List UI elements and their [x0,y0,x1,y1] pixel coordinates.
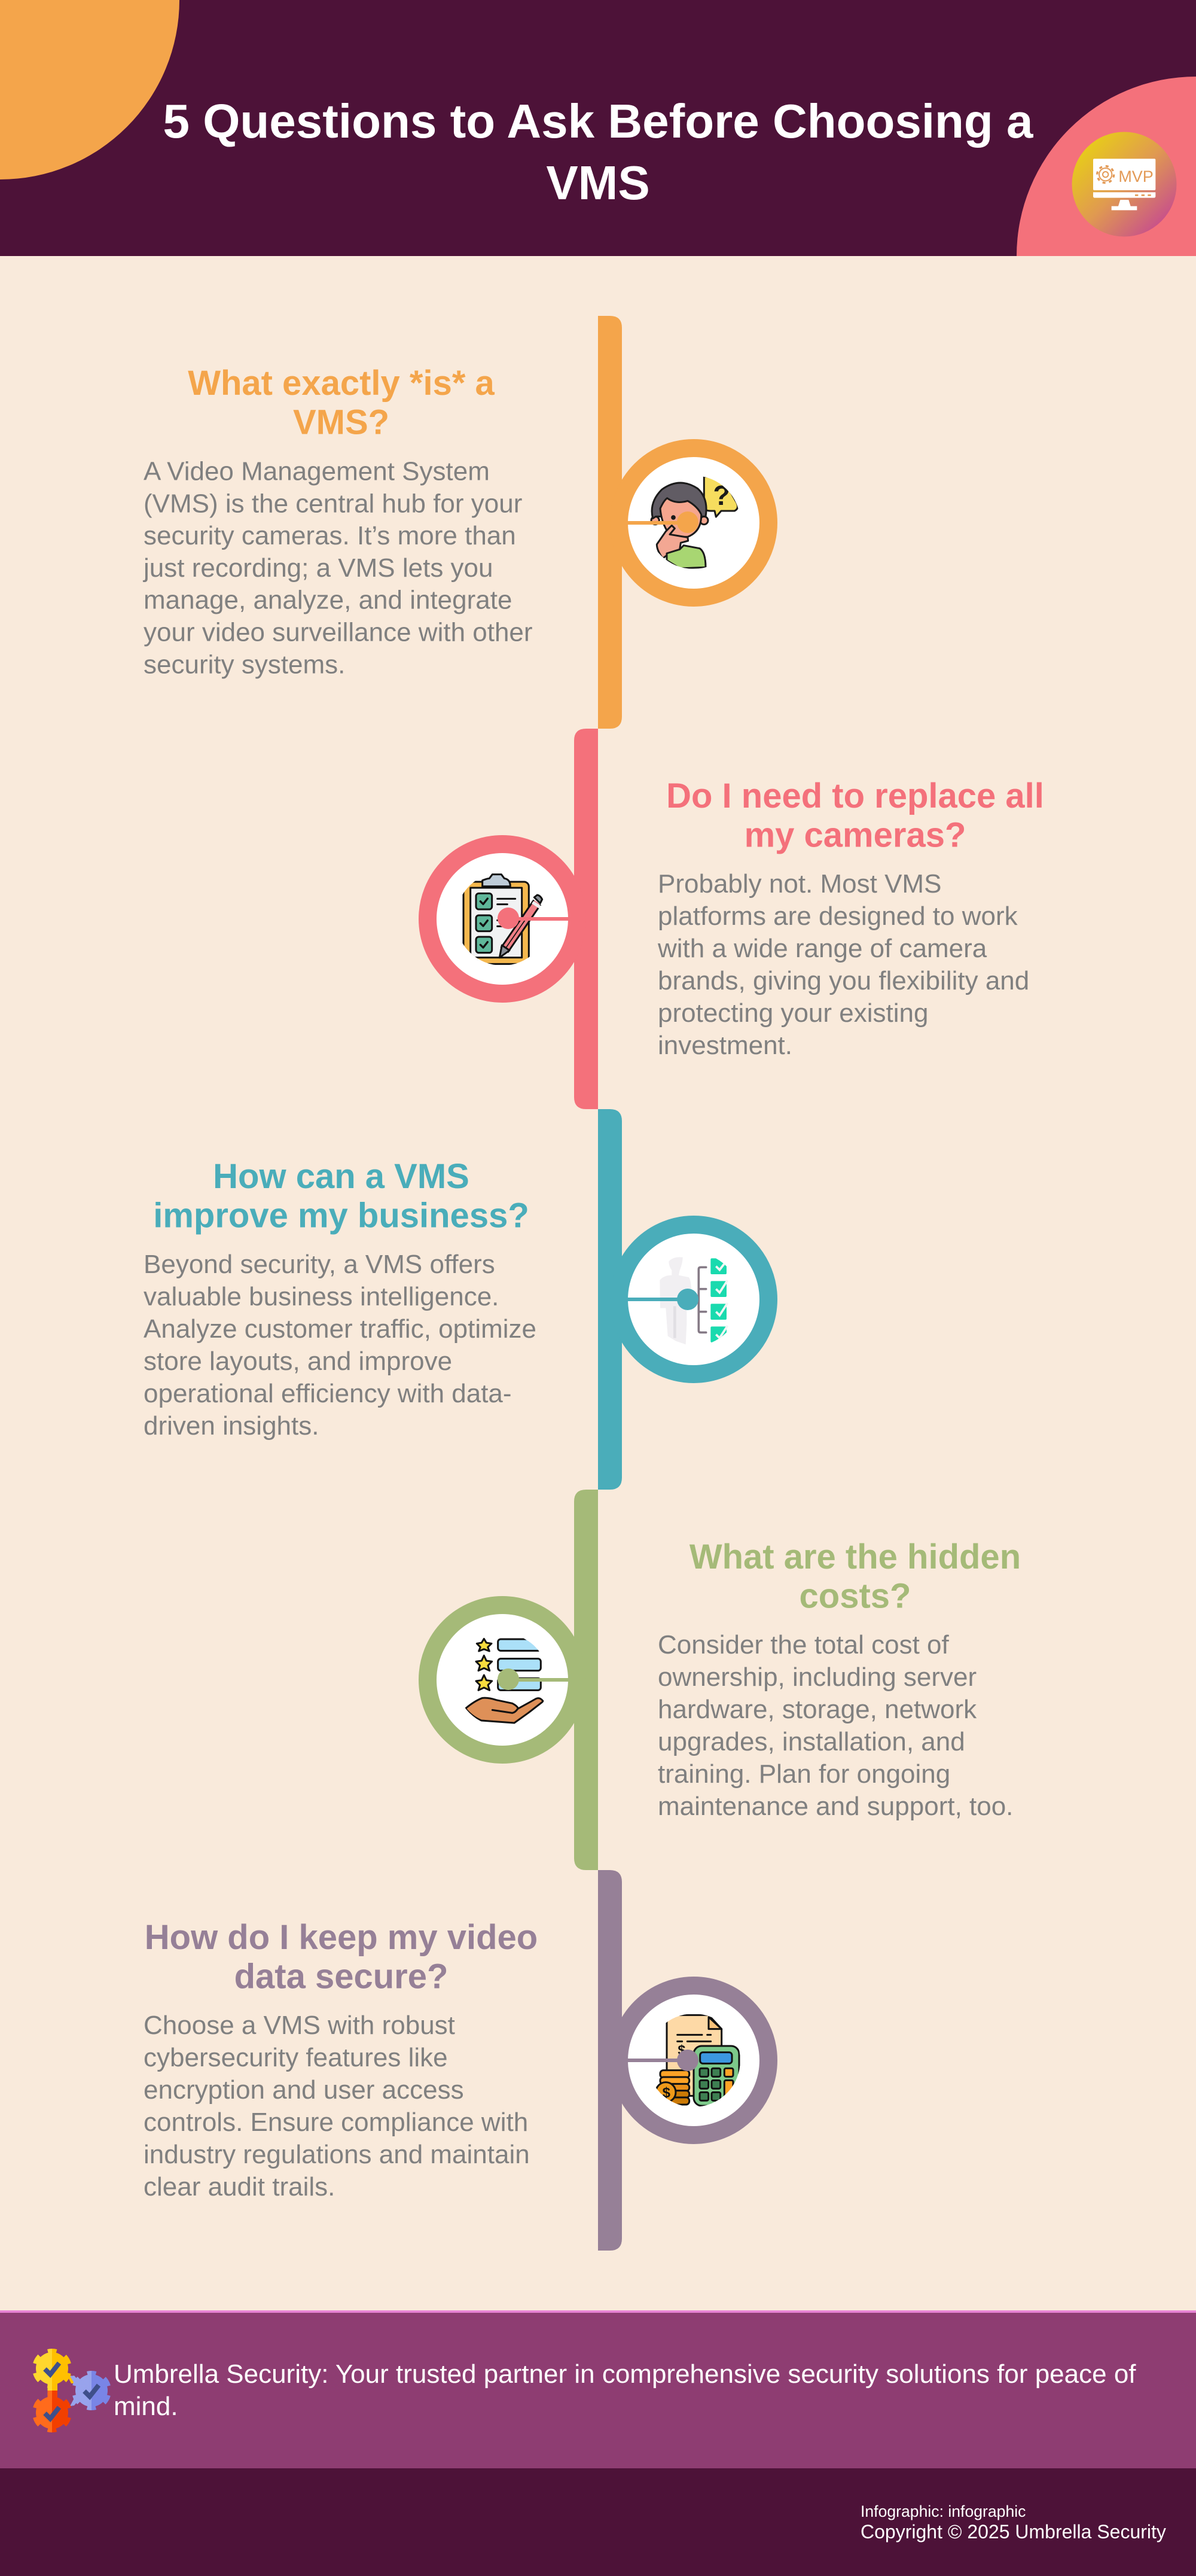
body 1: manage, analyze, and integrate [144,586,512,615]
body 4: Consider the total cost of [658,1630,949,1660]
icon: document, coins and calculator: $ [663,2085,670,2101]
body 4: hardware, storage, network [658,1695,977,1724]
body 5: encryption and user access [144,2075,464,2105]
timeline bar 3 [598,1109,622,1490]
body 3: store layouts, and improve [144,1347,452,1376]
body 2 [657,869,1029,1060]
body 5: controls. Ensure compliance with [144,2108,528,2137]
body 1: security cameras. It’s more than [144,521,516,550]
timeline bar 2 [574,729,598,1109]
body 4: ownership, including server [658,1662,977,1692]
heading 1: What exactly *is* a [188,364,495,403]
connector line 2 [514,917,568,921]
timeline bar 5 [598,1870,622,2251]
credit text: Infographic: infographic [861,2502,1026,2520]
body 5: Choose a VMS with robust [144,2011,455,2040]
connector line 5 [628,2059,682,2062]
connector line 1 [628,521,682,525]
body 2: platforms are designed to work [658,902,1018,931]
decorative orange circle [0,0,179,179]
body 2: with a wide range of camera [657,934,987,963]
icon: MVP monitor badge [1072,132,1177,237]
icon: three connected gears [35,2352,108,2429]
body 1: your video surveillance with other [144,617,533,647]
connector dot 5 [677,2050,698,2071]
body 3: Analyze customer traffic, optimize [144,1314,536,1344]
heading 3: improve my business? [153,1196,529,1235]
title: VMS [546,156,650,209]
icon: document, coins and calculator: $ [678,2042,685,2058]
body 3: operational efficiency with data- [144,1379,512,1408]
heading 2: Do I need to replace all [666,777,1044,815]
heading 4: costs? [800,1577,911,1615]
panel: question 4 text [658,1537,1021,1821]
body 4 [658,1630,1013,1821]
heading 3: How can a VMS [213,1157,469,1196]
body 1 [142,457,533,679]
panel: question 1 text [142,364,533,679]
body 3: valuable business intelligence. [144,1282,499,1311]
body 4: upgrades, installation, and [658,1727,965,1756]
body 4: training. Plan for ongoing [658,1759,950,1789]
body 4: maintenance and support, too. [658,1792,1013,1821]
body 1: (VMS) is the central hub for your [144,489,522,518]
body 2: investment. [658,1031,792,1060]
connector dot 2 [498,908,519,929]
heading 5: How do I keep my video [145,1918,538,1957]
copyright bar [0,2468,1196,2576]
footer tagline: Umbrella Security: Your trusted partner in comprehensive security solutions for peace of [114,2359,1136,2389]
body 3 [144,1250,536,1441]
credit text [861,2502,1166,2542]
body 2: Probably not. Most VMS [658,869,941,899]
timeline bar 1 [598,316,622,729]
body 3: driven insights. [144,1411,319,1441]
icon: MVP monitor badge: MVP [1118,168,1154,185]
icon: person thinking with question bubble [619,448,768,598]
panel: question 3 text [144,1157,536,1441]
body 2: protecting your existing [658,998,928,1028]
decorative pink circle [1017,77,1196,256]
body 5: industry regulations and maintain [144,2140,530,2169]
icon: clipboard checklist with pencil [428,844,577,994]
body 3: Beyond security, a VMS offers [144,1250,495,1279]
body 2: brands, giving you flexibility and [658,966,1029,995]
heading 3 [153,1157,529,1235]
credit text: Copyright © 2025 Umbrella Security [861,2521,1166,2542]
heading 1 [188,364,495,441]
title [163,95,1033,209]
connector dot 3 [677,1289,698,1310]
connector dot 4 [498,1668,519,1690]
heading 4: What are the hidden [689,1537,1021,1576]
timeline bar 4 [574,1490,598,1870]
connector line 4 [514,1678,568,1682]
panel: question 5 text [144,1918,538,2202]
panel: question 2 text [657,777,1044,1060]
body 1: just recording; a VMS lets you [142,553,493,583]
icon: hand with star ratings [428,1605,577,1755]
body 5: cybersecurity features like [144,2043,448,2072]
heading 1: VMS? [293,403,389,441]
title: 5 Questions to Ask Before Choosing a [163,95,1033,148]
heading 2 [666,777,1044,854]
icon: person with checklist [619,1225,768,1374]
heading 5 [145,1918,538,1996]
body 1: A Video Management System [144,457,490,486]
icon: document, coins and calculator [619,1986,768,2135]
connector line 3 [628,1298,682,1301]
body 1: security systems. [144,650,345,679]
body 5: clear audit trails. [144,2172,335,2202]
body 5 [144,2011,530,2202]
footer band [0,2310,1196,2468]
heading 2: my cameras? [745,816,966,854]
footer tagline [114,2359,1136,2421]
icon: person thinking with question bubble: ? [713,480,730,511]
footer tagline: mind. [114,2392,178,2421]
connector dot 1 [677,511,698,533]
heading 4 [689,1537,1021,1615]
header band [0,0,1196,256]
heading 5: data secure? [234,1957,448,1996]
